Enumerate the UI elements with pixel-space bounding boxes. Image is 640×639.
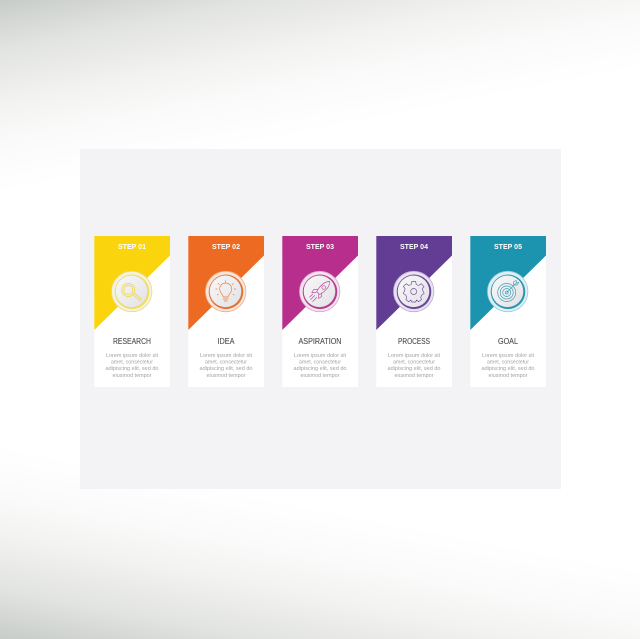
text: description: adipiscing elit, sed do — [387, 366, 440, 372]
badge: idea icon — [206, 271, 246, 312]
text: description: Lorem ipsum dolor sit — [482, 353, 534, 359]
text: description — [294, 353, 346, 379]
icon: target — [498, 280, 519, 302]
text: description: adipiscing elit, sed do — [106, 366, 159, 372]
text: description — [106, 353, 158, 379]
text: description: Lorem ipsum dolor sit — [200, 353, 252, 359]
badge: process icon — [394, 271, 434, 312]
text: description: eiusmod tempor — [394, 373, 434, 379]
text: description: amet, consectetur — [205, 360, 247, 366]
text: description: Lorem ipsum dolor sit — [388, 353, 440, 359]
icon: magnifier — [122, 284, 142, 301]
card: step 01 research — [94, 236, 170, 387]
badge: goal icon — [488, 271, 528, 312]
heading: step 03: STEP 03 — [306, 242, 334, 251]
card: step 05 goal — [470, 236, 546, 387]
text: description: Lorem ipsum dolor sit — [294, 353, 346, 359]
banner: orange — [188, 236, 264, 330]
title: aspiration: ASPIRATION — [298, 337, 341, 346]
text: description: eiusmod tempor — [300, 373, 340, 379]
title: research: RESEARCH — [113, 337, 151, 346]
heading: step 04: STEP 04 — [400, 242, 429, 251]
text: description — [388, 353, 440, 379]
title: goal: GOAL — [498, 337, 519, 346]
text: description: eiusmod tempor — [207, 373, 246, 379]
heading: step 05: STEP 05 — [494, 242, 522, 251]
text: description: eiusmod tempor — [488, 373, 528, 379]
text: description: adipiscing elit, sed do — [293, 366, 346, 372]
banner: magenta — [282, 236, 358, 330]
card: step 03 aspiration — [282, 236, 358, 387]
banner: yellow — [94, 236, 170, 330]
card: step 04 process — [376, 236, 452, 387]
text: description — [200, 353, 252, 379]
icon: rocket — [310, 282, 330, 302]
icon: light bulb — [216, 280, 236, 301]
banner: purple — [376, 236, 452, 330]
title: idea: IDEA — [218, 337, 235, 346]
text: description: amet, consectetur — [393, 360, 435, 366]
text: description: amet, consectetur — [299, 360, 341, 366]
icon: gear — [403, 282, 424, 302]
text: description: eiusmod tempor — [113, 373, 152, 379]
heading: step 02: STEP 02 — [212, 242, 240, 251]
text: description — [482, 353, 534, 379]
heading: step 01: STEP 01 — [118, 242, 146, 251]
text: description: amet, consectetur — [111, 360, 153, 366]
text: description: adipiscing elit, sed do — [200, 366, 253, 372]
title: process: PROCESS — [398, 337, 430, 346]
card: step 02 idea — [188, 236, 264, 387]
banner: teal — [470, 236, 546, 330]
text: description: amet, consectetur — [487, 360, 529, 366]
text: description: Lorem ipsum dolor sit — [106, 353, 158, 359]
text: description: adipiscing elit, sed do — [481, 366, 534, 372]
panel: background — [80, 149, 561, 489]
badge: aspiration icon — [300, 271, 340, 312]
badge: research icon — [112, 271, 152, 312]
